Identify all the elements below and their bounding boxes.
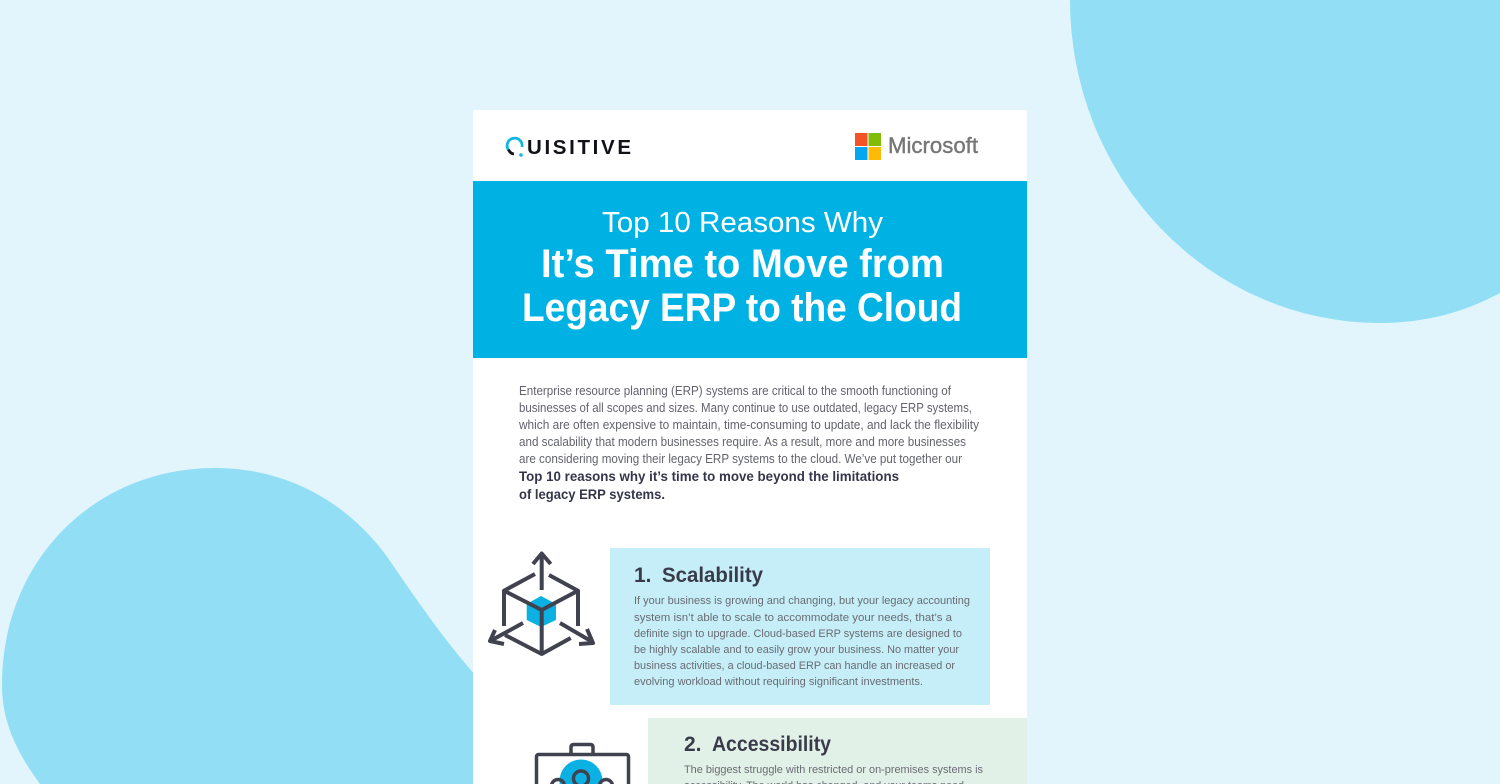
title: third line: Legacy ERP to the Cloud: [522, 286, 962, 330]
icon: scalability cube: [490, 554, 593, 654]
title: first line: Top 10 Reasons Why: [602, 207, 883, 239]
body text: Scalability: [634, 595, 970, 688]
body text: Scalability: business activities, a cloud-based ERP can handle an increased or: [634, 660, 955, 672]
intro paragraph: are considering moving their legacy ERP systems to the cloud. We’ve put together our: [519, 452, 962, 466]
background blob: bottom left: [2, 468, 480, 784]
intro paragraph: businesses of all scopes and sizes. Many continue to use outdated, legacy ERP systems,: [519, 401, 972, 415]
intro paragraph: and scalability that modern businesses require. As a result, more and more businesses: [519, 435, 966, 449]
logo: Microsoft: Microsoft: [888, 133, 979, 158]
body text: Scalability: evolving workload without requiring significant investments.: [634, 676, 923, 688]
icon: accessibility briefcase: [536, 744, 628, 784]
intro paragraph: of legacy ERP systems.: [519, 487, 665, 502]
logo: Microsoft: [855, 133, 979, 160]
background blob: top right: [1070, 0, 1500, 323]
body text: Accessibility: The biggest struggle with restricted or on-premises systems is: [684, 764, 983, 776]
panel: 2. Accessibility: [648, 718, 1027, 784]
heading: Scalability: Scalability: [662, 564, 763, 587]
body text: Accessibility: [684, 764, 983, 784]
heading: Accessibility: 2.: [684, 733, 702, 756]
title: second line: It’s Time to Move from: [541, 242, 944, 286]
logo: Quisitive: UISITIVE: [527, 136, 631, 159]
intro paragraph: Enterprise resource planning (ERP) systems are critical to the smooth functioning of: [519, 384, 951, 398]
heading: Scalability: 1.: [634, 564, 652, 587]
intro paragraph: which are often expensive to maintain, time-consuming to update, and lack the flexibility: [518, 418, 980, 432]
intro paragraph: Top 10 reasons why it’s time to move beyond the limitations: [519, 469, 899, 484]
infographic card: [473, 110, 1027, 784]
title banner: [473, 181, 1027, 358]
body text: Scalability: If your business is growing and changing, but your legacy accounting: [634, 595, 970, 607]
body text: Scalability: definite sign to upgrade. Cloud-based ERP systems are designed to: [634, 628, 962, 640]
heading: Accessibility: Accessibility: [712, 733, 831, 756]
panel: 1. Scalability: [610, 548, 990, 705]
body text: Scalability: system isn’t able to scale to accommodate your needs, that’s a: [634, 612, 953, 624]
intro paragraph: [518, 384, 980, 502]
body text: Scalability: be highly scalable and to easily grow your business. No matter your: [634, 644, 959, 656]
